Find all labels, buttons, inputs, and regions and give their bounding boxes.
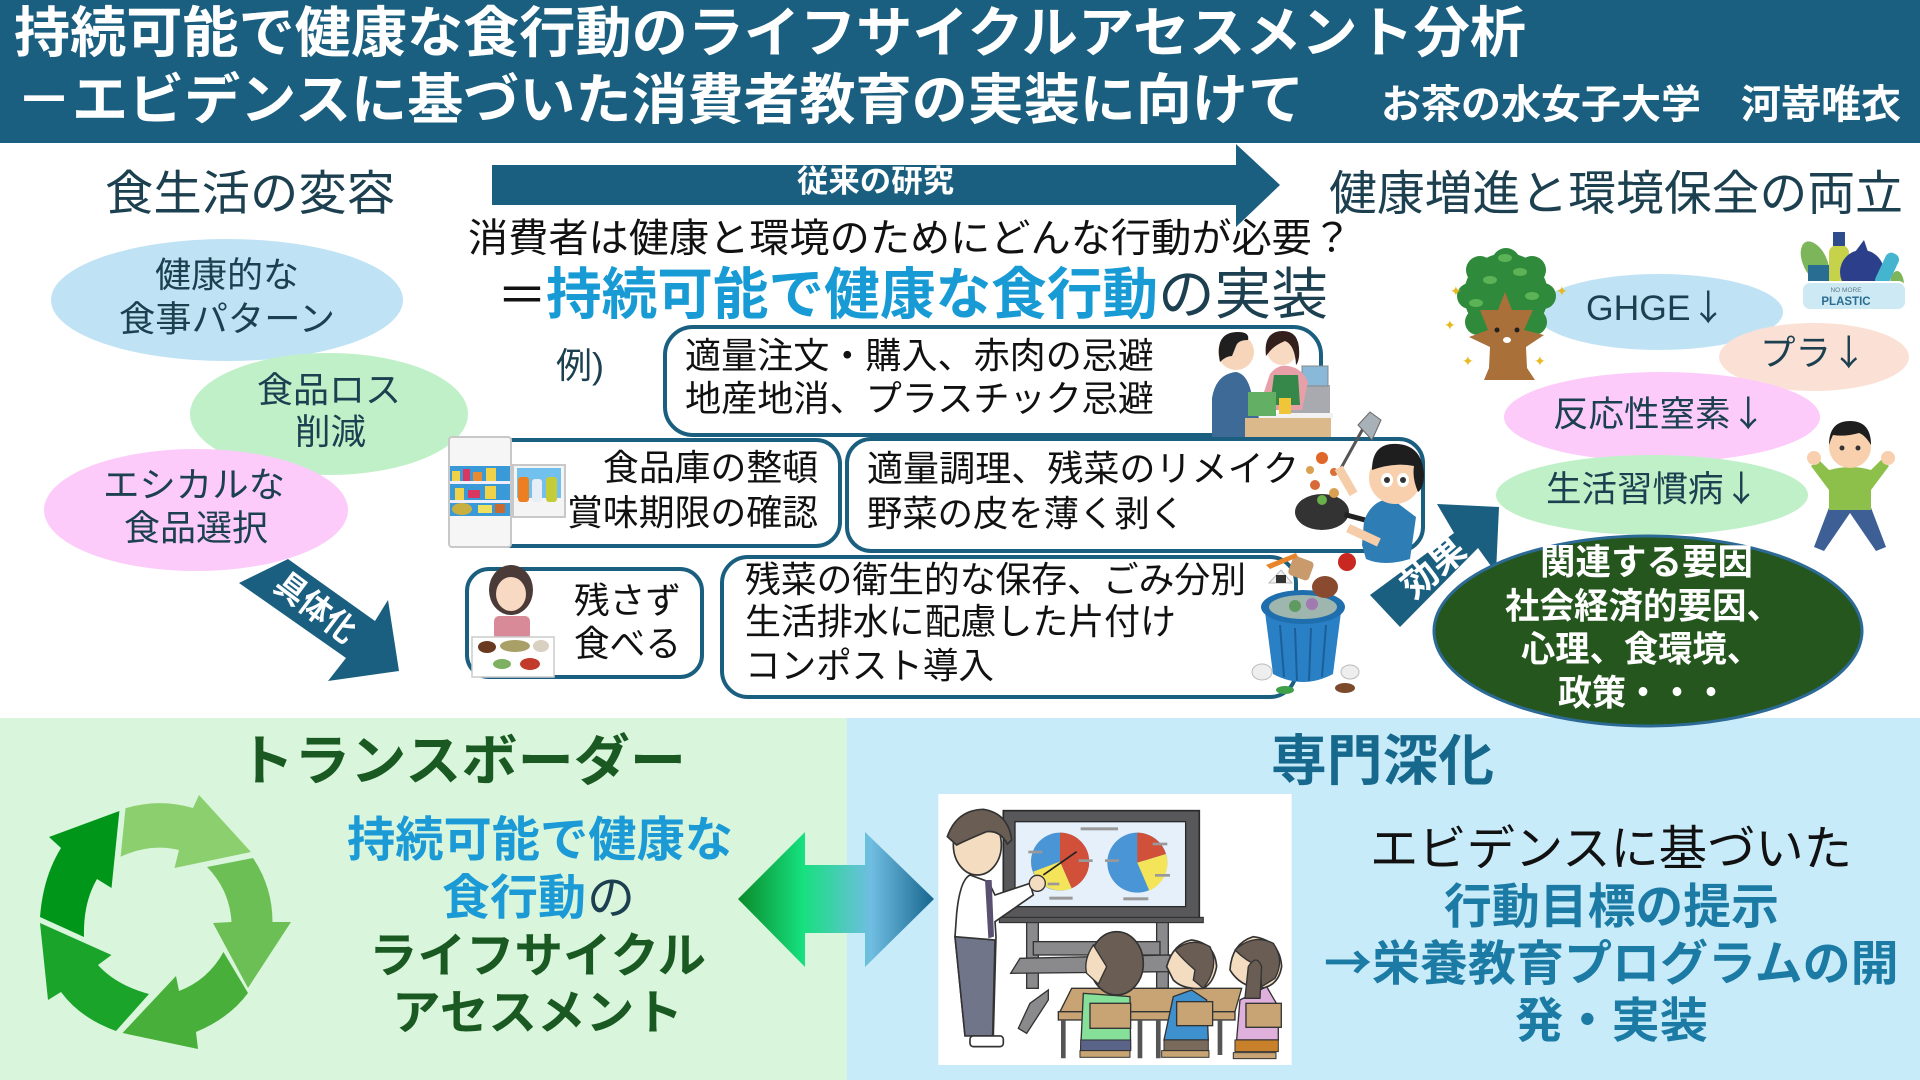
key statement: ＝ [497, 268, 547, 324]
icon: recycling cycle [40, 795, 291, 1049]
oval: related factors [1434, 536, 1862, 726]
panel: transborder [0, 718, 847, 1080]
box: storage and waste: 生活排水に配慮した片付け [745, 601, 1176, 642]
arrow: conventional research: 従来の研究 [797, 164, 954, 199]
title line 1: 持続可能で健康な食行動のライフサイクルアセスメント分析 [14, 2, 1526, 64]
oval: food loss: 食品ロス [257, 370, 401, 410]
oval: GHGE [1535, 274, 1783, 350]
oval: reactive nitrogen: 反応性窒素↓ [1553, 386, 1766, 437]
heading: specialization: 専門深化 [1271, 730, 1494, 792]
header banner [0, 0, 1920, 143]
box: eat everything [467, 569, 702, 677]
text: evidence-based goals: 行動目標の提示 [1444, 881, 1779, 934]
text: life cycle assessment of sustainable eating: ライフサイクル [369, 930, 706, 983]
oval: plastic [1719, 323, 1909, 391]
author: お茶の水女子大学 河嵜唯衣 [1381, 83, 1901, 127]
text: life cycle assessment of sustainable eating: 持続可能で健康な [347, 814, 733, 867]
heading: dietary change: 食生活の変容 [105, 168, 395, 221]
arrow: conventional research [492, 144, 1280, 227]
text: evidence-based goals [1324, 823, 1899, 1048]
oval: related factors: 心理、食環境、 [1521, 629, 1761, 669]
icon: no more plastic [1795, 232, 1906, 310]
box: cooking [847, 439, 1423, 551]
panel: specialization [847, 718, 1920, 1080]
text: life cycle assessment of sustainable eating [347, 814, 733, 1040]
arrow: effect: 効果 [1393, 529, 1474, 606]
icon: smiling tree [1444, 248, 1568, 380]
oval: ethical choice [44, 449, 348, 571]
oval: food loss [190, 353, 468, 475]
oval: related factors: 社会経済的要因、 [1505, 586, 1781, 626]
oval: healthy diet: 健康的な [155, 255, 299, 295]
oval: plastic: プラ↓ [1760, 325, 1867, 376]
oval: GHGE: GHGE↓ [1586, 280, 1726, 331]
oval: related factors: 関連する要因 [1540, 542, 1753, 582]
icon: smiling tree: ✦ [1450, 283, 1462, 299]
arrow: bidirectional [738, 832, 934, 967]
icon: smiling tree: ✦ [1534, 353, 1546, 369]
text: evidence-based goals: →栄養教育プログラムの開 [1324, 924, 1899, 994]
oval: ethical choice: エシカルな [103, 465, 285, 505]
question: 消費者は健康と環境のためにどんな行動が必要？ [468, 217, 1352, 261]
box: cooking: 適量調理、残菜のリメイク [867, 448, 1299, 489]
text: evidence-based goals: 発・実装 [1515, 995, 1708, 1048]
oval: lifestyle disease [1496, 455, 1808, 535]
oval: reactive nitrogen [1504, 372, 1820, 462]
icon: smiling tree: ✦ [1444, 317, 1456, 333]
icon: no more plastic: NO MORE [1830, 287, 1862, 294]
example label: 例) [556, 345, 604, 386]
box: cooking: 野菜の皮を薄く剥く [867, 493, 1185, 534]
oval: related factors: 政策・・・ [1558, 673, 1728, 713]
box: eat everything: 食べる [574, 623, 681, 664]
oval: healthy diet [51, 239, 403, 361]
heading: health and environment: 健康増進と環境保全の両立 [1329, 168, 1903, 221]
icon: classroom presentation [938, 794, 1292, 1065]
box: storage and waste: 残菜の衛生的な保存、ごみ分別 [745, 559, 1246, 600]
box: storage and waste [722, 557, 1296, 697]
icon: healthy man [1807, 421, 1895, 551]
icon: cook with frying pan [1295, 412, 1424, 563]
text: life cycle assessment of sustainable eating: 食行動 [442, 872, 586, 925]
box: pantry: 食品庫の整頓 [603, 447, 818, 488]
title line 2: －エビデンスに基づいた消費者教育の実装に向けて [16, 69, 1304, 131]
box: ordering and buying: 適量注文・購入、赤肉の忌避 [685, 335, 1154, 376]
icon: smiling tree: ✦ [1462, 353, 1474, 369]
box: pantry: 賞味期限の確認 [567, 492, 818, 533]
icon: woman with meal tray [472, 565, 554, 677]
key statement: 持続可能で健康な食行動 [546, 263, 1158, 326]
arrow: effect [1370, 504, 1499, 627]
box: pantry [480, 440, 840, 546]
box: ordering and buying: 地産地消、プラスチック忌避 [685, 378, 1154, 419]
arrow: concretize: 具体化 [268, 565, 364, 650]
icon: fridge [449, 437, 565, 547]
oval: food loss: 削減 [295, 412, 366, 452]
heading: transborder: トランスボーダー [238, 730, 686, 792]
icon: no more plastic: PLASTIC [1821, 296, 1871, 308]
oval: healthy diet: 食事パターン [119, 299, 335, 339]
box: storage and waste: コンポスト導入 [745, 645, 994, 686]
oval: ethical choice: 食品選択 [124, 508, 268, 548]
icon: smiling tree: ✦ [1556, 283, 1568, 299]
key statement: の実装 [1158, 263, 1328, 326]
box: ordering and buying [665, 327, 1321, 435]
icon: trash bin with food [1252, 553, 1359, 694]
text: evidence-based goals: エビデンスに基づいた [1370, 823, 1852, 876]
arrow: concretize [239, 559, 399, 681]
text: life cycle assessment of sustainable eating: アセスメント [392, 987, 683, 1040]
oval: lifestyle disease: 生活習慣病↓ [1546, 461, 1759, 512]
box: eat everything: 残さず [574, 580, 681, 621]
text: life cycle assessment of sustainable eating: の [587, 872, 635, 925]
icon: cashier and customer [1212, 331, 1333, 437]
